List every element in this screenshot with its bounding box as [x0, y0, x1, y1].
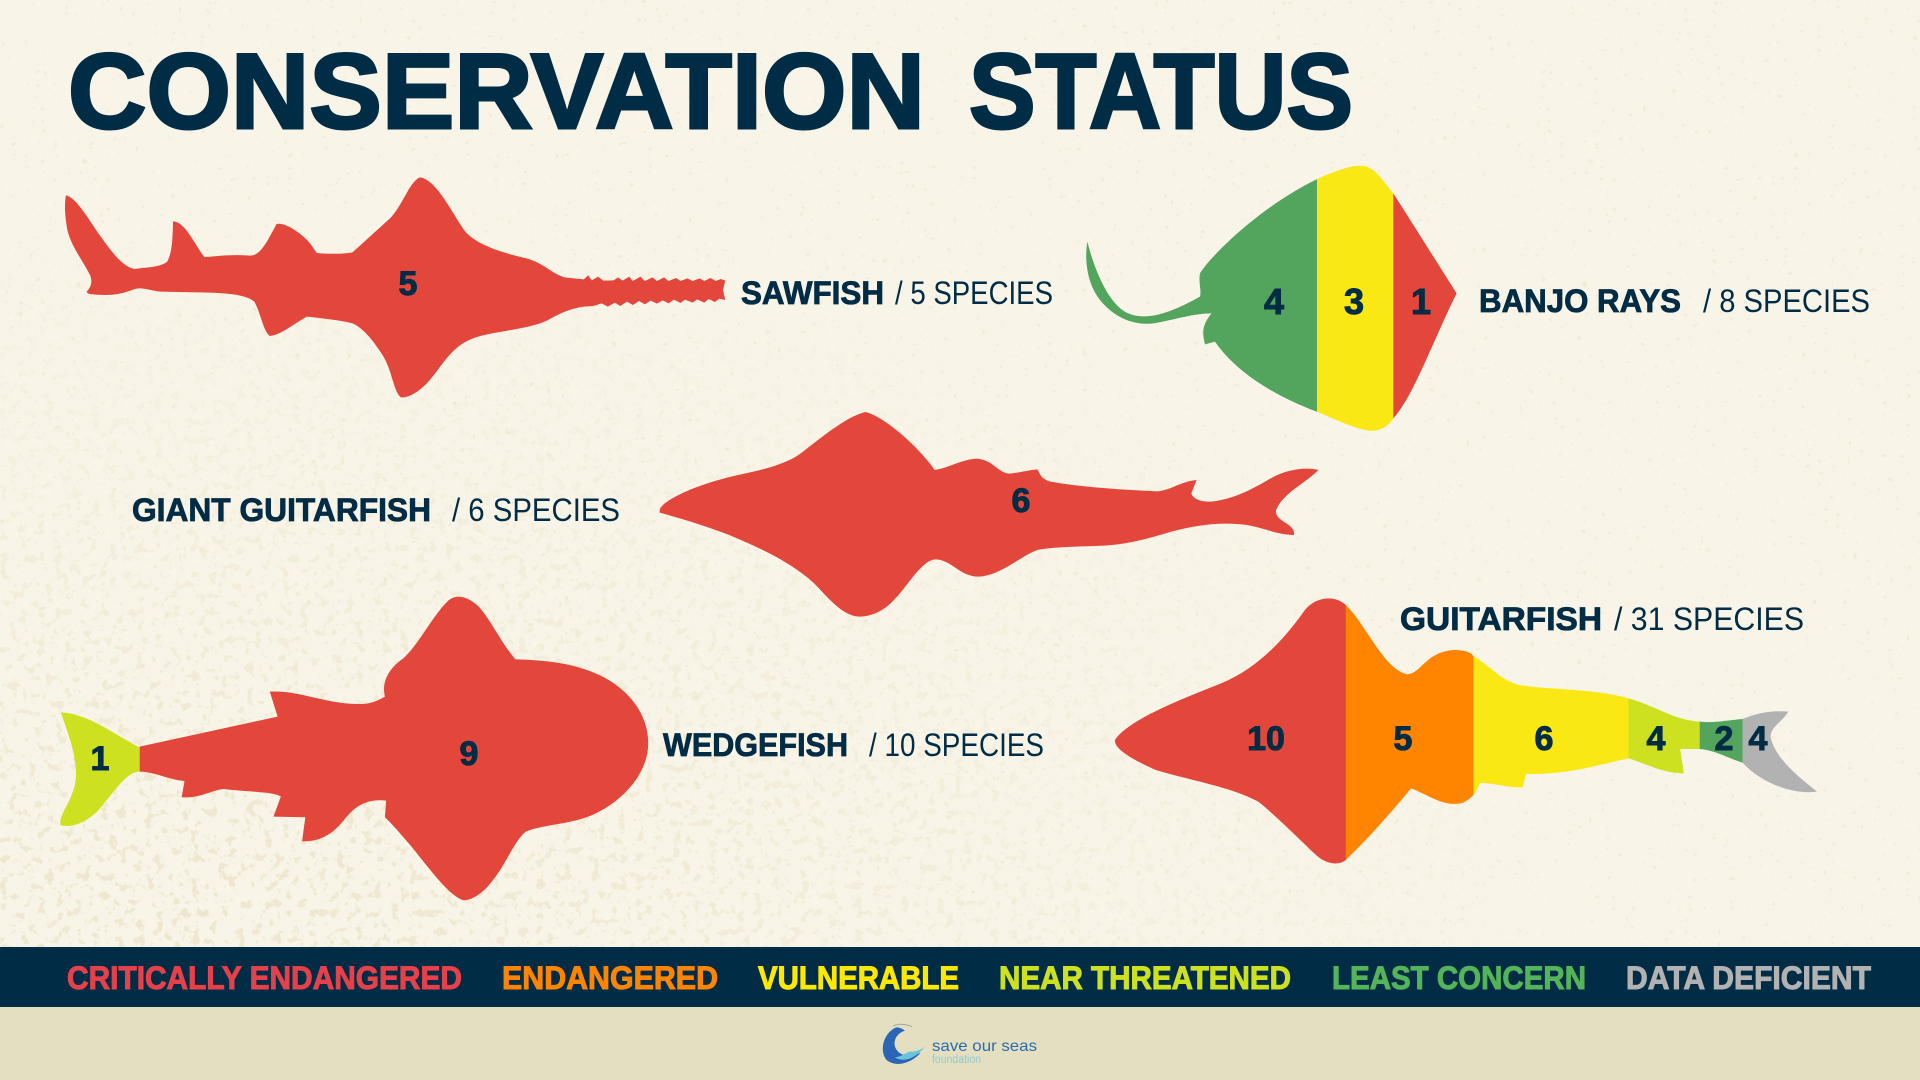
label: wedgefish: [663, 727, 1044, 763]
panel: banjo rays: [1060, 150, 1870, 450]
count: critically endangered: 9: [460, 735, 478, 773]
label: guitarfish: GUITARFISH: [1400, 601, 1602, 637]
count: near threatened: 4: [1647, 720, 1666, 758]
label: giant guitarfish: / 6 SPECIES: [452, 492, 620, 528]
title: CONSERVATION: [68, 31, 925, 151]
count: least concern: 2: [1715, 720, 1733, 758]
count: least concern: 4: [1264, 281, 1284, 322]
wedgefish tail: [60, 712, 140, 826]
label: wedgefish: / 10 SPECIES: [869, 727, 1044, 763]
sawfish silhouette: [65, 177, 725, 397]
panel: wedgefish: [60, 597, 1044, 900]
wedgefish body: [140, 597, 648, 900]
label: guitarfish: [1400, 601, 1804, 637]
panel: sawfish: [65, 177, 1053, 397]
panel: guitarfish: [1114, 598, 1817, 864]
count: near threatened: 1: [91, 740, 109, 778]
count: vulnerable: 3: [1344, 281, 1364, 322]
legend: least concern: LEAST CONCERN: [1332, 960, 1586, 996]
legend bar: [0, 947, 1920, 1007]
legend: critically endangered: CRITICALLY ENDANGERED: [67, 960, 462, 996]
label: giant guitarfish: GIANT GUITARFISH: [132, 492, 431, 528]
banjo ray silhouette: [1086, 166, 1456, 431]
label: banjo rays: / 8 SPECIES: [1703, 283, 1870, 319]
label: guitarfish: / 31 SPECIES: [1614, 601, 1804, 637]
count: vulnerable: 6: [1535, 720, 1553, 758]
label: sawfish: [741, 275, 1053, 311]
legend: vulnerable: VULNERABLE: [758, 960, 959, 996]
logo subtitle: foundation: [932, 1054, 981, 1066]
legend: endangered: ENDANGERED: [502, 960, 718, 996]
label: giant guitarfish: [132, 492, 620, 528]
title: [68, 31, 1353, 151]
logo wordmark: save our seas: [932, 1038, 1037, 1055]
footer band: [0, 1007, 1920, 1080]
logo: save our seas foundation: [883, 1024, 1037, 1066]
legend: data deficient: DATA DEFICIENT: [1626, 960, 1871, 996]
label: wedgefish: WEDGEFISH: [663, 727, 848, 763]
count: critically endangered: 5: [399, 265, 417, 303]
label: banjo rays: [1479, 283, 1870, 319]
guitarfish silhouette: [1114, 598, 1817, 864]
count: critically endangered: 6: [1012, 482, 1030, 520]
title: STATUS: [969, 31, 1353, 151]
panel: giant guitarfish: [132, 412, 1319, 617]
giant guitarfish silhouette: [660, 412, 1319, 617]
icon: wave swirl: [883, 1024, 925, 1064]
label: sawfish: SAWFISH: [741, 275, 884, 311]
label: banjo rays: BANJO RAYS: [1479, 283, 1681, 319]
legend: near threatened: NEAR THREATENED: [999, 960, 1291, 996]
count: endangered: 5: [1394, 720, 1412, 758]
count: critically endangered: 1: [1411, 281, 1431, 322]
count: data deficient: 4: [1749, 720, 1768, 758]
label: sawfish: / 5 SPECIES: [895, 275, 1053, 311]
count: critically endangered: 10: [1247, 720, 1285, 758]
